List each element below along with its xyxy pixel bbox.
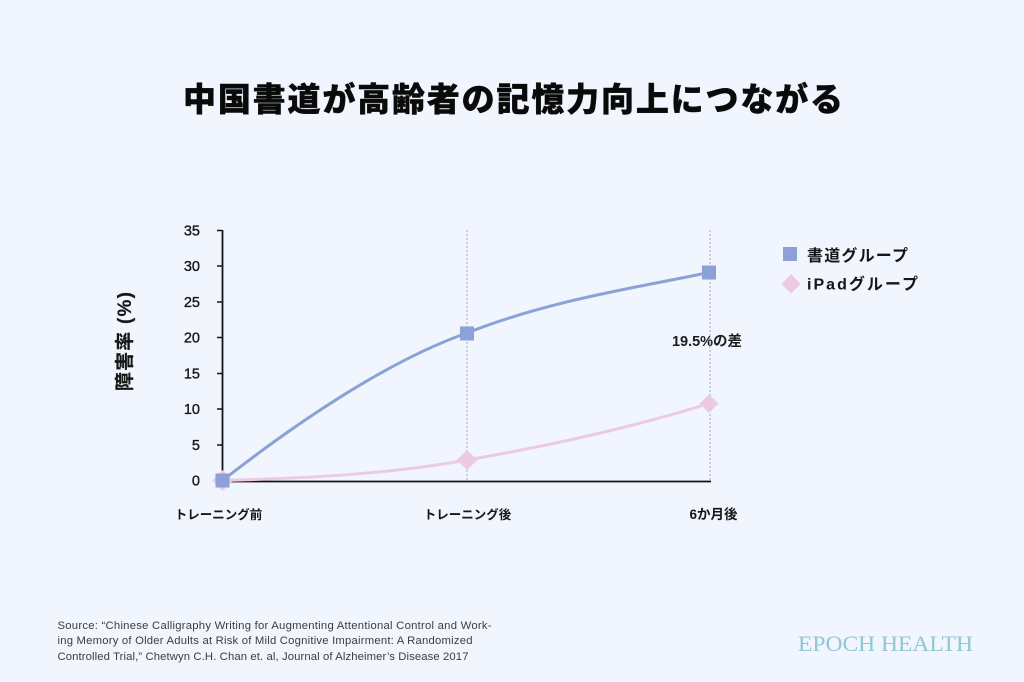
source note bbox=[58, 620, 492, 663]
series: calligraphy group markers bbox=[216, 266, 716, 488]
y axis tick labels: 0 bbox=[192, 474, 200, 490]
title: 中国書道が高齢者の記憶力向上につながる bbox=[183, 81, 843, 118]
legend label: iPad group: iPadグループ bbox=[807, 274, 918, 294]
source note: Source: “Chinese Calligraphy Writing for Augmenting Attentional Control and Work- bbox=[58, 620, 492, 632]
x axis labels: トレーニング後 bbox=[424, 507, 512, 522]
series: calligraphy group line bbox=[222, 272, 709, 480]
x axis labels bbox=[175, 506, 738, 522]
x axis labels: トレーニング前 bbox=[175, 507, 262, 522]
series: iPad group line bbox=[222, 404, 709, 480]
series: iPad group markers bbox=[212, 394, 718, 491]
legend icon: calligraphy group bbox=[783, 247, 797, 261]
annotation: 19.5% difference: 19.5%の差 bbox=[672, 332, 742, 350]
y axis tick labels: 10 bbox=[184, 402, 200, 418]
legend icon: iPad group bbox=[782, 274, 800, 294]
legend label: calligraphy group: 書道グループ bbox=[807, 246, 908, 265]
source note: Controlled Trial,” Chetwyn C.H. Chan et. al, Journal of Alzheimer’s Disease 2017 bbox=[58, 651, 468, 663]
line chart bbox=[175, 224, 742, 522]
legend bbox=[782, 246, 918, 294]
x axis labels: 6か月後 bbox=[689, 506, 738, 522]
y axis tick labels: 15 bbox=[184, 366, 200, 382]
source note: ing Memory of Older Adults at Risk of Mild Cognitive Impairment: A Randomized bbox=[58, 635, 472, 647]
y axis tick labels: 30 bbox=[184, 259, 200, 275]
axes bbox=[217, 230, 711, 482]
logo: Epoch Health: EPOCH HEALTH bbox=[798, 631, 973, 656]
y axis tick labels bbox=[184, 224, 200, 490]
y axis title: 障害率 (%) bbox=[114, 291, 136, 391]
y axis tick labels: 25 bbox=[184, 295, 200, 311]
y axis tick labels: 20 bbox=[184, 330, 200, 346]
y axis tick labels: 5 bbox=[192, 438, 200, 454]
y axis tick labels: 35 bbox=[184, 224, 200, 240]
